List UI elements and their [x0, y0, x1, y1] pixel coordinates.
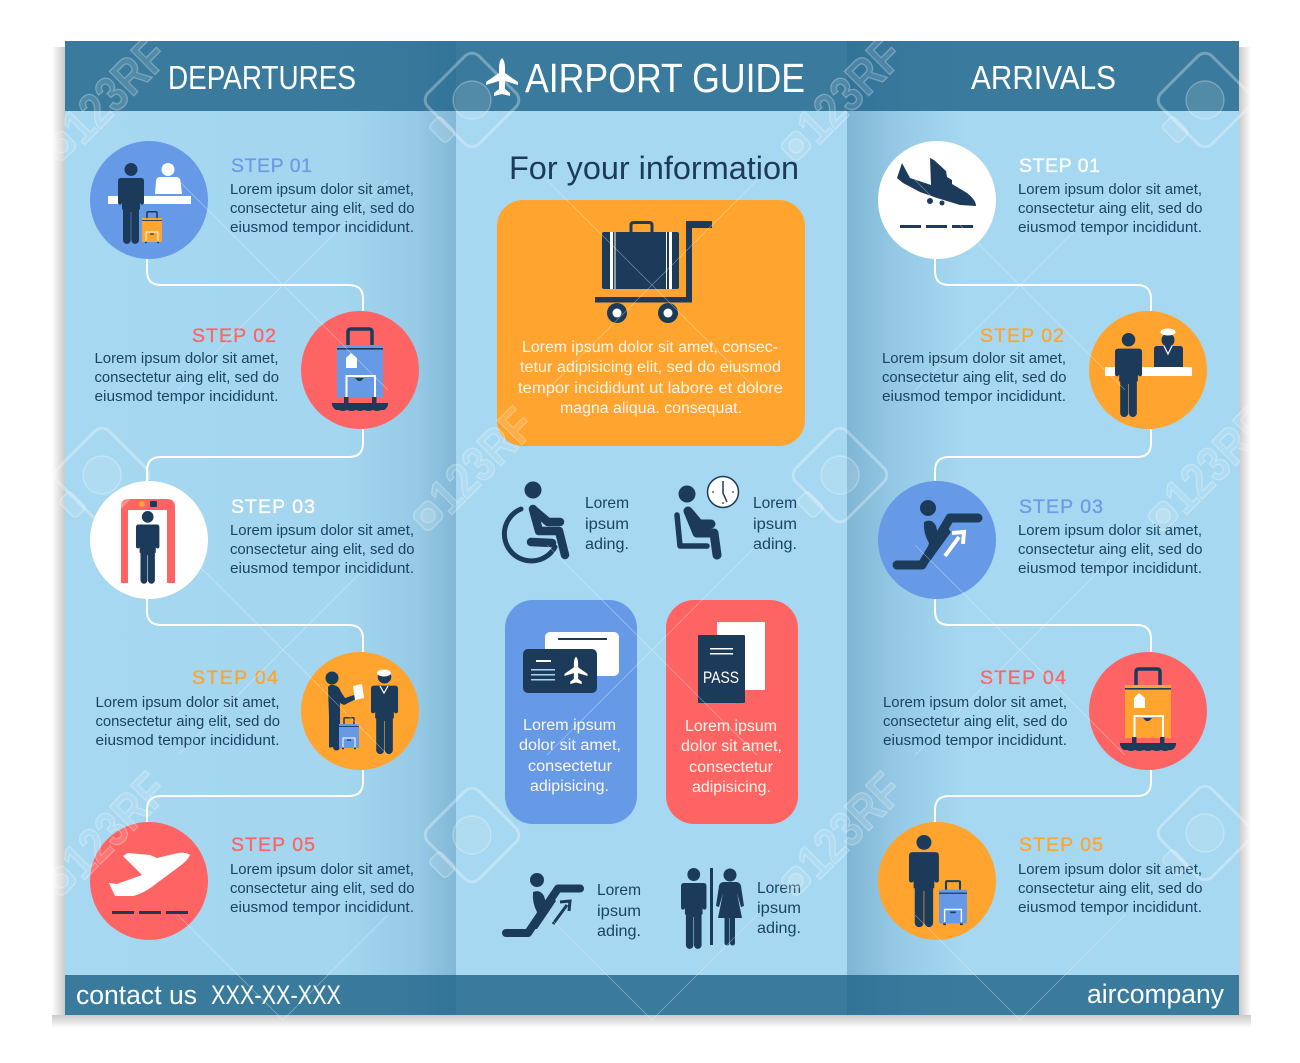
text block [681, 718, 782, 796]
step 03 departures: text [230, 496, 414, 577]
step 01 arrivals: text: Lorem ipsum dolor sit amet, [1018, 182, 1202, 198]
step 02 arrivals: text: STEP 02 [980, 325, 1064, 347]
icon: passport [698, 622, 765, 703]
step 02 departures: baggage icon [301, 311, 419, 429]
footer: company: aircompany [1087, 979, 1224, 1009]
text: restroom label: ipsum [757, 900, 801, 917]
step 05 departures: text: Lorem ipsum dolor sit amet, [230, 862, 414, 878]
step 01 departures: text: consectetur aing elit, sed do [230, 201, 414, 217]
step 04 arrivals: text [883, 667, 1068, 749]
text block: tetur adipisicing elit, sed do eiusmod [520, 359, 781, 376]
step 03 departures: text: consectetur aing elit, sed do [230, 542, 414, 558]
step 01 arrivals: text: STEP 01 [1019, 155, 1100, 177]
step 04 arrivals: baggage claim icon [1089, 652, 1207, 770]
step 01 departures: check-in icon [90, 141, 208, 259]
text block: dolor sit amet, [681, 738, 782, 755]
text: waiting label: ipsum [753, 516, 797, 533]
icon: waiting seat and clock [677, 476, 738, 555]
text block: adipisicing. [692, 779, 771, 796]
text: escalator label: Lorem [597, 882, 641, 899]
text: wheelchair label: ading. [585, 536, 629, 553]
step 04 departures: text [96, 667, 280, 749]
step 04 departures: text: consectetur aing elit, sed do [96, 714, 280, 730]
text block: Lorem ipsum [685, 718, 777, 735]
text: waiting label [753, 495, 797, 553]
step 03 arrivals: text: eiusmod tempor incididunt. [1018, 561, 1202, 577]
step 04 arrivals: text: STEP 04 [980, 667, 1066, 689]
icon: boarding tickets [523, 632, 619, 693]
icon: escalator [506, 873, 580, 933]
text block: magna aliqua. consequat. [560, 400, 742, 417]
heading: for your information: For your information [509, 150, 799, 186]
step 01 departures: text: eiusmod tempor incididunt. [230, 220, 414, 236]
text: waiting label: Lorem [753, 495, 797, 512]
step 03 departures: text: STEP 03 [231, 496, 315, 518]
title: departures: DEPARTURES [168, 59, 356, 96]
step 02 departures: text: STEP 02 [192, 325, 276, 347]
step 02 arrivals: text [882, 325, 1066, 405]
icon: passport: PASS [703, 668, 739, 687]
text block: dolor sit amet, [519, 737, 621, 754]
icon: wheelchair [504, 482, 565, 561]
step 01 departures: text: Lorem ipsum dolor sit amet, [230, 182, 414, 198]
text: restroom label: Lorem [757, 880, 801, 897]
step 03 arrivals: text: STEP 03 [1019, 496, 1103, 518]
panel: red passport card [666, 600, 798, 824]
step 05 arrivals: text: consectetur aing elit, sed do [1018, 881, 1202, 897]
step 01 arrivals: text: eiusmod tempor incididunt. [1018, 220, 1202, 236]
step 04 departures: text: eiusmod tempor incididunt. [96, 733, 280, 749]
text: escalator label: ipsum [597, 903, 641, 920]
panel: orange baggage cart [497, 200, 805, 446]
step 05 arrivals: text [1018, 834, 1202, 916]
step 05 departures: text: consectetur aing elit, sed do [230, 881, 414, 897]
step 02 departures: text: Lorem ipsum dolor sit amet, [94, 351, 278, 367]
step 03 departures: security gate icon [90, 481, 208, 599]
step 03 arrivals: text: Lorem ipsum dolor sit amet, [1018, 523, 1202, 539]
step 04 departures: text: STEP 04 [192, 667, 278, 689]
step 04 arrivals: text: Lorem ipsum dolor sit amet, [883, 695, 1067, 711]
step 01 departures: text: STEP 01 [231, 155, 312, 177]
footer: contact: contact us [76, 980, 197, 1010]
step 03 arrivals: text: consectetur aing elit, sed do [1018, 542, 1202, 558]
text block: Lorem ipsum dolor sit amet, consec- [522, 339, 778, 356]
step 04 arrivals: text: eiusmod tempor incididunt. [883, 733, 1067, 749]
icon: header plane [486, 58, 518, 96]
step 05 arrivals: text: eiusmod tempor incididunt. [1018, 900, 1202, 916]
step 04 arrivals: text: consectetur aing elit, sed do [883, 714, 1068, 730]
icon: baggage cart [595, 221, 712, 323]
step 05 departures: takeoff icon [90, 822, 208, 940]
footer: contact [76, 980, 341, 1010]
step 05 arrivals: text: STEP 05 [1019, 834, 1103, 856]
step 03 arrivals: text [1018, 496, 1202, 577]
step 03 departures: text: eiusmod tempor incididunt. [230, 561, 414, 577]
connector lines: arrivals [935, 259, 1151, 822]
text block: adipisicing. [530, 778, 609, 795]
icon: restroom [681, 868, 744, 949]
step 03 departures: text: Lorem ipsum dolor sit amet, [230, 523, 414, 539]
text: wheelchair label [585, 495, 629, 553]
step 05 departures: text [230, 834, 414, 916]
connector lines: departures [147, 259, 363, 822]
step 04 departures: text: Lorem ipsum dolor sit amet, [96, 695, 280, 711]
text block: tempor incididunt ut labore et dolore [518, 380, 783, 397]
step 03 arrivals: escalator icon [878, 481, 996, 599]
text block [519, 717, 621, 795]
text block [518, 339, 783, 417]
step 01 arrivals: text [1018, 155, 1202, 236]
step 02 arrivals: text: consectetur aing elit, sed do [882, 370, 1066, 386]
text block: Lorem ipsum [523, 717, 616, 734]
text block: consectetur [689, 759, 773, 776]
step 02 departures: text [94, 325, 279, 405]
step 05 departures: text: eiusmod tempor incididunt. [230, 900, 414, 916]
step 02 arrivals: text: eiusmod tempor incididunt. [882, 389, 1066, 405]
step 05 arrivals: text: Lorem ipsum dolor sit amet, [1018, 862, 1202, 878]
step 05 departures: text: STEP 05 [231, 834, 315, 856]
text: wheelchair label: Lorem [585, 495, 629, 512]
text block: consectetur [528, 758, 612, 775]
step 02 arrivals: passport control icon [1089, 311, 1207, 429]
title: arrivals: ARRIVALS [971, 59, 1116, 96]
title: airport guide: AIRPORT GUIDE [525, 55, 805, 101]
text: escalator label [597, 882, 641, 940]
text: restroom label: ading. [757, 920, 801, 937]
text: escalator label: ading. [597, 923, 641, 940]
step 01 arrivals: text: consectetur aing elit, sed do [1018, 201, 1202, 217]
text: waiting label: ading. [753, 536, 797, 553]
footer: contact: XXX-XX-XXX [211, 980, 341, 1010]
step 01 departures: text [230, 155, 414, 236]
step 02 departures: text: consectetur aing elit, sed do [94, 370, 279, 386]
step 04 departures: document check icon [301, 652, 419, 770]
step 02 arrivals: text: Lorem ipsum dolor sit amet, [882, 351, 1066, 367]
step 05 arrivals: traveller icon [878, 822, 996, 940]
text: wheelchair label: ipsum [585, 516, 629, 533]
step 02 departures: text: eiusmod tempor incididunt. [94, 389, 278, 405]
panel: blue tickets card [505, 600, 637, 824]
step 01 arrivals: landing icon [878, 141, 996, 259]
text: restroom label [757, 880, 801, 937]
